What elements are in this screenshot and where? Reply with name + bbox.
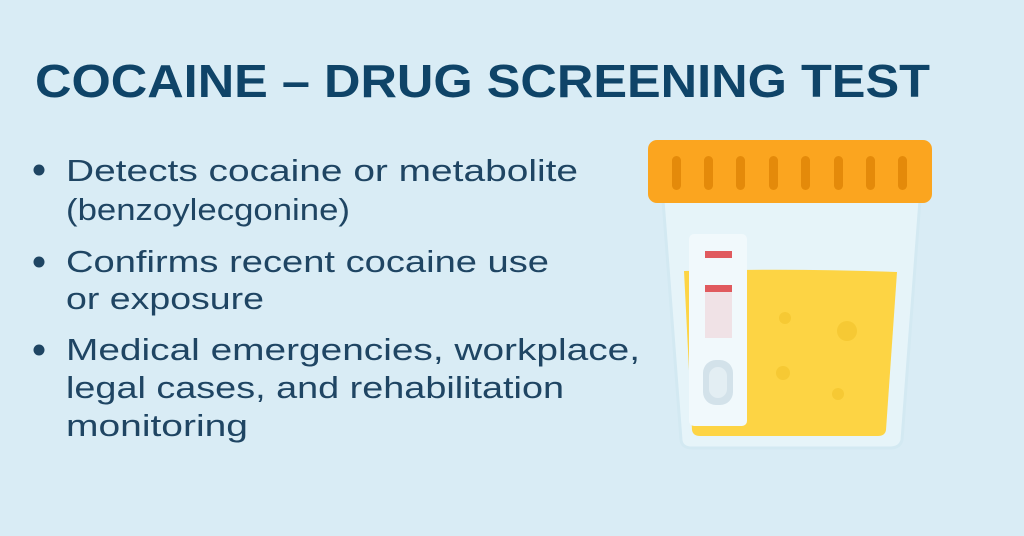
liquid [684, 270, 897, 436]
bullet 2: Confirms recent cocaine use [66, 244, 549, 279]
cup body [663, 200, 920, 448]
bullet 1: (benzoylecgonine) [66, 192, 350, 227]
icon: urine sample cup [648, 140, 932, 448]
bullet 2 [34, 244, 549, 316]
bullet 1: Detects cocaine or metabolite [66, 153, 578, 188]
bullet 1 [34, 153, 578, 227]
bullet 3: Medical emergencies, workplace, [66, 332, 640, 367]
lid [648, 140, 932, 203]
test strip [689, 234, 747, 426]
bullet 3: legal cases, and rehabilitation [66, 370, 564, 405]
title: COCAINE – DRUG SCREENING TEST [35, 55, 930, 107]
bullet 2: or exposure [66, 281, 264, 316]
bullet 3 [34, 332, 640, 443]
bullet 3: monitoring [66, 408, 248, 443]
bullet list [34, 153, 640, 443]
